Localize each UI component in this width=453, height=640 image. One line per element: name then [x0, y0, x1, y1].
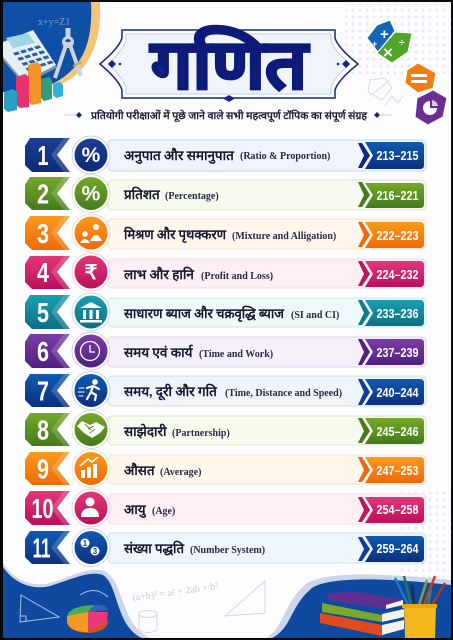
row 6: Time and Work: समय एवं कार्य [123, 344, 194, 360]
row 1: Ratio and Proportion: (Ratio & Proportion) [240, 151, 330, 162]
row 6: Time and Work: 237–239 [376, 345, 418, 360]
row 4: Profit and Loss: 224–232 [376, 267, 418, 282]
row 11: Number System: 259–264 [376, 541, 419, 556]
icons: operator hexagons top right: + [372, 39, 377, 49]
dotted pattern top right [345, 3, 451, 78]
row 11: Number System [25, 528, 426, 566]
row 2: Percentage: (Percentage) [165, 191, 219, 202]
bottom right blue wave [266, 574, 451, 638]
dotted pattern bottom right [400, 490, 451, 590]
row 5: SI and CI: (SI and CI) [291, 310, 339, 321]
icon: plaque ornaments [108, 60, 350, 102]
icons: operator hexagons top right: + [380, 26, 389, 43]
top left blue panel with calculator and chart [3, 2, 100, 112]
icon: numbered balls: 3 [93, 547, 98, 556]
row 3: Mixture and Alligation: मिश्रण और पृथक्करण [123, 226, 227, 243]
row 8: Partnership: 245–246 [376, 424, 418, 439]
row 2: Percentage: प्रतिशत [123, 186, 161, 202]
icon: numbered balls: 1 [83, 539, 88, 548]
row 8: Partnership [25, 410, 426, 448]
icon: runner [78, 380, 99, 400]
row 3: Mixture and Alligation: (Mixture and Alligation) [232, 231, 336, 242]
row 1: Ratio and Proportion: % [82, 144, 101, 167]
row 10: Age: 10 [32, 493, 54, 524]
row 5: SI and CI: 233–236 [376, 306, 418, 321]
row 3: Mixture and Alligation: 222–223 [376, 228, 418, 243]
row 5: SI and CI [25, 293, 426, 331]
row 9: Average: (Average) [160, 467, 201, 478]
row 4: Profit and Loss: (Profit and Loss) [201, 271, 273, 282]
row 5: SI and CI: 5 [37, 297, 49, 328]
row 10: Age: आयु [124, 502, 147, 518]
title plaque [100, 26, 358, 103]
title text: गणित [149, 26, 309, 103]
row 4: Profit and Loss: लाभ और हानि [123, 266, 194, 282]
icon: clock [80, 342, 100, 360]
icon: growth chart [80, 457, 98, 478]
faint formula and geometry sketches [132, 581, 265, 632]
row 2: Percentage [25, 174, 426, 212]
bar chart [4, 62, 63, 112]
row 9: Average: 247–253 [376, 463, 418, 478]
top left blue panel with calculator and chart: x+y=Z1 [38, 17, 70, 28]
row 8: Partnership: (Partnership) [172, 428, 230, 439]
icon: compass [55, 28, 82, 78]
row 7: Time, Distance and Speed: (Time, Distance and Speed) [225, 388, 342, 399]
row 11: Number System: 11 [32, 532, 50, 564]
row 11: Number System: (Number System) [190, 545, 265, 556]
icon: people [80, 224, 102, 243]
row 7: Time, Distance and Speed: 240–244 [376, 385, 419, 400]
row 9: Average: औसत [124, 462, 156, 478]
row 7: Time, Distance and Speed: 7 [37, 376, 49, 406]
row 8: Partnership: साझेदारी [123, 423, 167, 439]
icon: handshake [77, 421, 105, 438]
icons: operator hexagons top right: × [383, 43, 393, 62]
icons: operator hexagons top right [367, 20, 447, 125]
row 7: Time, Distance and Speed: समय, दूरी और गति [123, 383, 218, 401]
bottom left blue wave with geometry [3, 563, 150, 638]
row 6: Time and Work: 6 [37, 336, 49, 367]
row 4: Profit and Loss [25, 253, 426, 291]
row 8: Partnership: 8 [37, 414, 49, 446]
row 5: SI and CI: साधारण ब्याज और चक्रवृद्धि ब्याज [123, 305, 285, 322]
row 2: Percentage: 216–221 [376, 188, 418, 203]
row 7: Time, Distance and Speed [25, 372, 426, 410]
row 10: Age [25, 489, 426, 527]
faint formula and geometry sketches: (a+b)² = a² + 2ab + b² [132, 581, 219, 604]
row 10: Age: 254–258 [376, 502, 418, 517]
row 2: Percentage: 2 [37, 178, 49, 210]
row 10: Age: (Age) [152, 506, 175, 517]
icon: calculator [3, 30, 56, 85]
faint graph sketches [368, 78, 403, 106]
row 3: Mixture and Alligation: 3 [37, 218, 49, 249]
row 1: Ratio and Proportion: अनुपात और समानुपात [124, 147, 235, 164]
icon: pencil cup [395, 576, 445, 638]
icon: bank [80, 302, 102, 322]
subtitle: प्रतियोगी परीक्षाओं में पूछे जाने वाले सभी महत्वपूर्ण टॉपिक का संपूर्ण संग्रह [90, 109, 368, 123]
row 6: Time and Work [25, 332, 426, 370]
row 9: Average: 9 [37, 454, 49, 484]
row 4: Profit and Loss: ₹ [85, 262, 98, 284]
row 4: Profit and Loss: 4 [37, 257, 49, 288]
row 1: Ratio and Proportion: 1 [38, 140, 48, 171]
row 1: Ratio and Proportion [25, 136, 426, 174]
icon: pie chart [67, 605, 108, 633]
row 11: Number System: संख्या पद्धति [123, 540, 185, 556]
row 9: Average [25, 450, 426, 488]
row 6: Time and Work: (Time and Work) [199, 349, 273, 360]
subtitle [64, 109, 392, 123]
icons: operator hexagons top right: ÷ [399, 38, 405, 49]
icon: person [81, 498, 99, 517]
row 3: Mixture and Alligation [25, 214, 426, 252]
icon: numbered balls [80, 538, 100, 556]
row 2: Percentage: % [82, 182, 101, 206]
icon: stack of books [320, 591, 404, 636]
row 1: Ratio and Proportion: 213–215 [376, 148, 418, 163]
icon: triangle [20, 590, 108, 622]
